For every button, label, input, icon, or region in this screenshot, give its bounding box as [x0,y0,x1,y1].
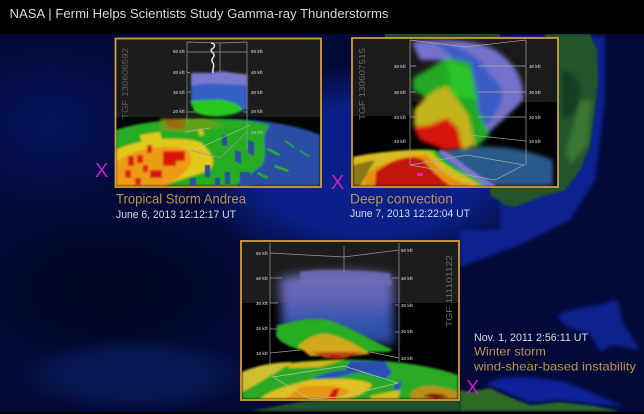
panel: Winter storm radar: 10 kft [256,351,268,356]
panel: Winter storm radar: 40 kft [256,276,268,281]
panel: Winter storm radar: 50 kft [256,251,268,256]
TGF id: TGF 130606592 [120,48,130,119]
panel: Deep convection radar: 30 kft [529,90,541,95]
caption: Tropical Storm Andrea: June 6, 2013 12:12:17 UT [116,209,236,221]
panel: Winter storm radar [241,241,459,400]
title bar [0,0,644,34]
land: Cuba coast [460,388,620,411]
panel: Deep convection radar: 20 kft [529,115,541,120]
ground radar [440,146,553,186]
altitude labels: 30 kft [173,90,185,95]
TGF id: TGF 130607515 [357,48,367,120]
caption: Deep convection [350,192,470,220]
marker: X Winter storm: X [466,377,479,399]
panel: Deep convection radar: 20 kft [394,115,406,120]
panel: Deep convection radar: 40 kft [394,64,406,69]
altitude labels: 30 kft [251,90,263,95]
altitude labels: 50 kft [251,49,263,54]
3D axis box [410,40,526,180]
panel: Winter storm radar: 20 kft [401,329,413,334]
panel: Deep convection radar [352,38,558,187]
bahamas shallows [557,300,640,352]
altitude labels: 20 kft [173,109,185,114]
ground radar [242,359,458,399]
altitude labels: 40 kft [173,70,185,75]
storm volume [280,271,394,345]
storm volume [190,71,247,116]
panel: Winter storm radar: 30 kft [256,301,268,306]
panel: Winter storm radar: 40 kft [401,276,413,281]
caption: Tropical Storm Andrea [116,192,246,221]
panel: Winter storm radar: 30 kft [401,303,413,308]
caption: Deep convection: June 7, 2013 12:22:04 UT [350,208,470,220]
title bar: NASA | Fermi Helps Scientists Study Gamma-ray Thunderstorms [10,6,389,21]
caption: Deep convection: Deep convection [350,192,453,206]
altitude labels: 10 kft [251,130,263,135]
marker: X Andrea: X [95,160,108,182]
panel: Deep convection radar: 40 kft [529,64,541,69]
gulf shelf [196,70,502,250]
panel: Deep convection radar: 10 kft [529,139,541,144]
panel: Deep convection radar: 10 kft [394,139,406,144]
panel: Tropical Storm Andrea radar [116,38,321,187]
altitude labels: 20 kft [251,109,263,114]
altitude labels: 50 kft [173,49,185,54]
3D axis box [185,42,250,158]
marker: X Deep convection: X [331,172,344,194]
altitude labels: 40 kft [251,70,263,75]
caption: Winter storm: wind-shear-based instability [473,360,636,374]
lightning track [211,43,214,73]
radar ground [116,118,320,186]
storm volume [412,40,523,150]
3D axis box [270,243,399,399]
TGF id: TGF 111101122 [445,254,454,327]
caption: Winter storm: Nov. 1, 2011 2:56:11 UT [474,332,588,344]
altitude labels [173,49,263,135]
caption: Tropical Storm Andrea: Tropical Storm Andrea [116,192,246,206]
caption: Winter storm [473,332,636,374]
caption: Winter storm: Winter storm [474,344,546,358]
panel: Deep convection radar: 30 kft [394,90,406,95]
panel: Winter storm radar: 50 kft [401,248,413,253]
land: Florida peninsula [490,34,598,207]
panel: Winter storm radar: 20 kft [256,326,268,331]
panel: Winter storm radar: 10 kft [401,356,413,361]
